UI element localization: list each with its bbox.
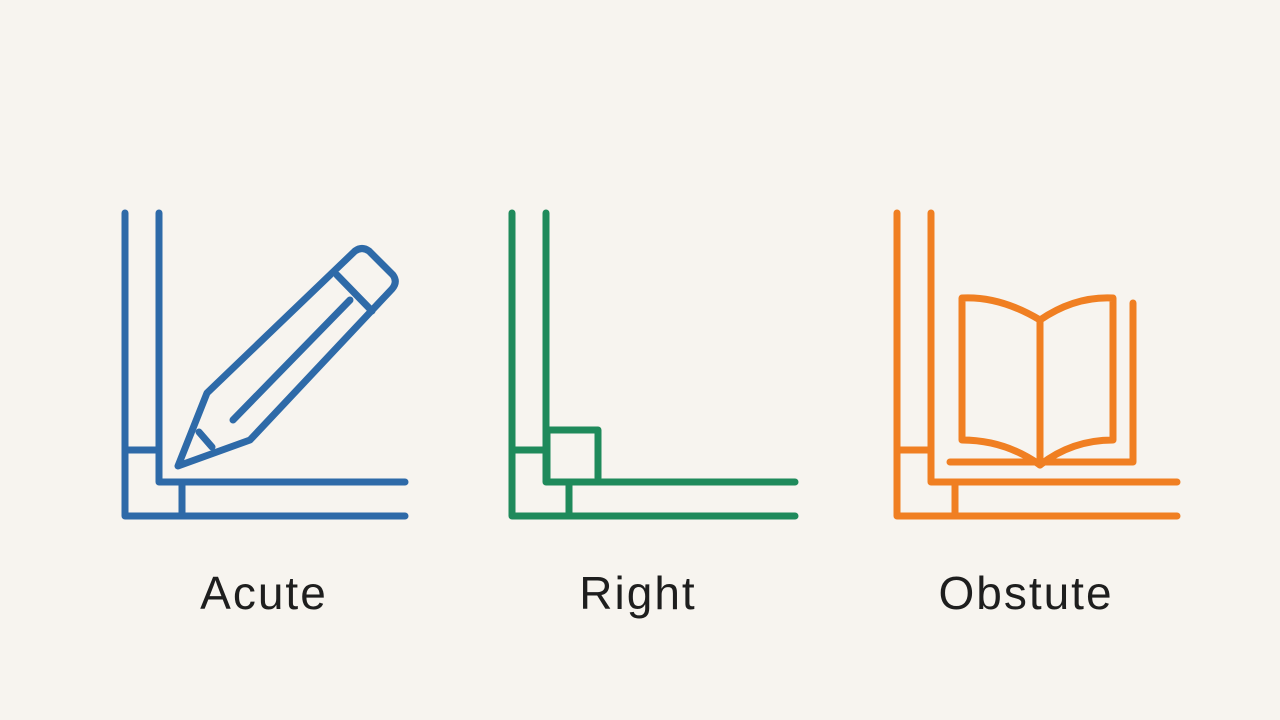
label: Right: Right	[579, 567, 697, 619]
icon: acute angle with pencil	[125, 213, 405, 516]
label: Acute: Acute	[200, 567, 328, 619]
label: Obstute: Obstute	[938, 567, 1114, 619]
icon: right angle	[512, 213, 795, 516]
icon: obtuse angle with book	[897, 213, 1177, 516]
